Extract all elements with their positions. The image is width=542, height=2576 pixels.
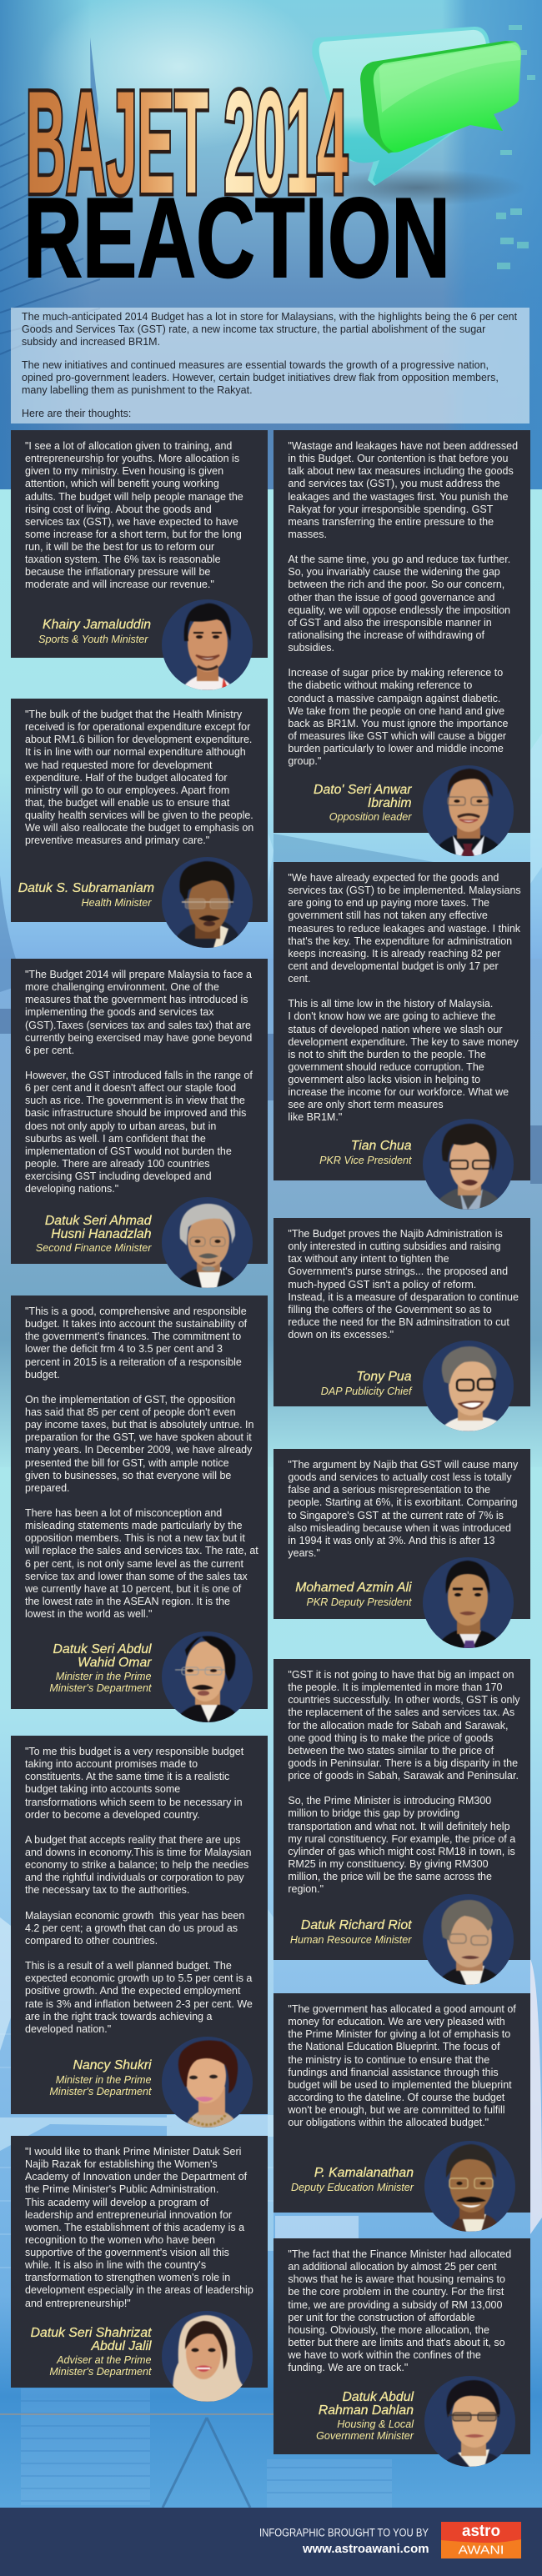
- quote text: preventive measures and primary care.": [25, 834, 209, 846]
- quote text: the ministry is to continue to ensure that the: [288, 2054, 489, 2066]
- quote text: the government's finances. The commitment to: [25, 1331, 241, 1342]
- quote text: fundings and financial assistance through this: [288, 2067, 499, 2078]
- name: Tony Pua: [321, 1370, 413, 1397]
- quote text: We take from the people on one hand and give: [288, 705, 504, 717]
- quote text: and services tax (GST), you must address the: [288, 478, 500, 489]
- quote text: "To me this budget is a very responsible budget: [25, 1746, 243, 1757]
- quote text: On the implementation of GST, the opposition: [25, 1394, 235, 1406]
- quote text: better but there are limits and that's about it, so: [288, 2337, 505, 2348]
- quote text: government still has not taken any effective: [288, 910, 488, 921]
- quote text: that's the key. The expenditure for administration: [288, 935, 512, 947]
- quote text: has said that 85 per cent of people don't even: [25, 1406, 236, 1418]
- quote text: "We have already expected for the goods and: [288, 872, 499, 884]
- quote text: the Prime Minister's Public Administration.: [25, 2183, 218, 2195]
- portrait: Dato' Seri Anwar Ibrahim: [423, 765, 514, 856]
- quote text: the replacement of the sales and services tax. As: [288, 1706, 514, 1718]
- name: Datuk Seri Shahrizat Abdul Jalil: Datuk Seri Shahrizat: [31, 2326, 152, 2340]
- logo: astro awani: AWANI: [459, 2543, 504, 2558]
- quote text: group.": [288, 755, 321, 767]
- quote text: "The government has allocated a good amount of: [288, 2003, 516, 2015]
- quote text: measures to reduce leakages and wastage. I think: [288, 922, 520, 934]
- quote text: time, we are providing a subsidy of RM 13,000: [288, 2299, 502, 2311]
- panel: introduction: The much-anticipated 2014 Budget has a lot in store for Malaysians, with the highlights being the 6 per cent: [22, 310, 517, 322]
- name: Datuk Seri Shahrizat Abdul Jalil: Adviser at the Prime: [57, 2354, 152, 2366]
- quote text: presented the bill for GST, with ample notice: [25, 1457, 229, 1469]
- quote text: "The Budget 2014 will prepare Malaysia to face a: [25, 969, 252, 980]
- quote text: one good thing is to make the price of goods: [288, 1732, 493, 1744]
- name: Khairy Jamaluddin: Khairy Jamaluddin: [43, 618, 151, 632]
- quote text: 6 per cent, is not only same level as the current: [25, 1557, 243, 1569]
- quote text: We will also reallocate the budget to emphasis on: [25, 822, 253, 834]
- panel: introduction: The new initiatives and continued measures are essential towards the growth of a progressive nation,: [22, 358, 489, 370]
- quote text: more challenging environment. One of the: [25, 981, 219, 993]
- quote text: [25, 709, 253, 846]
- quote text: services tax (GST) to be implemented. Malaysians: [288, 885, 521, 896]
- quote text: our obligations within the allocated budget.": [288, 2117, 489, 2128]
- name: Datuk Abdul Rahman Dahlan: Rahman Dahlan: [319, 2403, 414, 2418]
- name: Dato' Seri Anwar Ibrahim: Dato' Seri Anwar: [314, 783, 412, 797]
- name: Datuk S. Subramaniam: Health Minister: [82, 897, 152, 909]
- quote text: positive growth. And the expected employment: [25, 1985, 240, 1997]
- portrait: Mohamed Azmin Ali: [423, 1557, 514, 1648]
- quote text: cent.: [288, 973, 310, 985]
- name: Mohamed Azmin Ali: PKR Deputy President: [307, 1596, 412, 1607]
- name: Tony Pua: DAP Publicity Chief: [321, 1386, 412, 1397]
- quote text: people. There are already 100 countries: [25, 1158, 209, 1170]
- quote text: housing. Obviously, the more allocation, the: [288, 2324, 489, 2336]
- quote text: budget. It takes into account the sustainability of: [25, 1318, 247, 1330]
- name: Datuk Richard Riot: Datuk Richard Riot: [301, 1918, 412, 1932]
- name: Datuk Richard Riot: [290, 1918, 412, 1946]
- quote text: region.": [288, 1883, 324, 1895]
- quote text: attention, which will benefit young working: [25, 478, 219, 489]
- quote text: that, the budget will enable us to ensure that: [25, 797, 229, 809]
- name: Datuk Seri Abdul Wahid Omar: Wahid Omar: [78, 1656, 152, 1669]
- quote text: rate is 3% and inflation between 2-3 per cent. We: [25, 1997, 253, 2009]
- quote text: also misleading because when it was introduced: [288, 1522, 511, 1534]
- quote text: million to bridge this gap by providing: [288, 1807, 459, 1819]
- quote text: leadership and entrepreneurial innovation for: [25, 2209, 232, 2221]
- panel: Nancy Shukri: [11, 1736, 268, 2127]
- quote text: per unit for the construction of affordable: [288, 2312, 475, 2323]
- name: Datuk Abdul Rahman Dahlan: Datuk Abdul: [343, 2390, 414, 2404]
- quote text: countries successfully. In other words, GST is only: [288, 1694, 520, 1706]
- quote text: RM25 in my constituency. By giving RM300: [288, 1858, 489, 1870]
- quote text: "Wastage and leakages have not been addressed: [288, 440, 518, 452]
- quote text: service tax and lower than some of the sales tax: [25, 1571, 248, 1582]
- quote text: price of goods in Sabah, Sarawak and Peninsular.: [288, 1770, 519, 1782]
- logo: astro awani: [441, 2522, 521, 2558]
- quote text: This is a result of a well planned budget. The: [25, 1960, 232, 1972]
- quote text: people. Starting at 6%, it is exorbitant. Comparing: [288, 1496, 518, 1508]
- quote text: [288, 1669, 520, 1895]
- quote text: "I see a lot of allocation given to training, and: [25, 440, 232, 452]
- quote text: false and a serious misrepresentation to the: [288, 1484, 490, 1496]
- quote text: while. It is also in line with the country's: [25, 2259, 206, 2271]
- name: Datuk Seri Abdul Wahid Omar: [49, 1642, 152, 1694]
- portrait: Tony Pua: [423, 1341, 514, 1431]
- quote text: misleading statements made particularly by the: [25, 1520, 243, 1531]
- quote text: leakages and the wastages first. You punish the: [288, 490, 508, 502]
- quote text: implementation of GST would not burden the: [25, 1145, 232, 1157]
- quote text: Malaysian economic growth this year has been: [25, 1910, 244, 1922]
- quote text: opposition members. This is not a new tax but it: [25, 1532, 245, 1544]
- quote text: "The Budget proves the Najib Administration is: [288, 1228, 503, 1240]
- quote text: [288, 440, 518, 767]
- quote text: like BR1M.": [288, 1111, 342, 1123]
- name: Datuk Seri Shahrizat Abdul Jalil: Abdul Jalil: [91, 2339, 152, 2353]
- panel: Tony Pua: [274, 1218, 530, 1431]
- quote text: will replace the sales and services tax. The rate, at: [25, 1545, 258, 1556]
- name: Datuk Seri Abdul Wahid Omar: Minister's Department: [49, 1682, 152, 1694]
- quote text: services tax (GST), we have expected to have: [25, 516, 238, 528]
- name: Tian Chua: PKR Vice President: [319, 1154, 412, 1165]
- name: Datuk Richard Riot: Human Resource Minister: [290, 1934, 412, 1946]
- quote text: Najib Razak for establishing the Women's: [25, 2158, 218, 2170]
- quote text: [25, 1306, 258, 1620]
- portrait: Datuk Abdul Rahman Dahlan: [424, 2376, 515, 2467]
- quote text: my rural constituency. For example, the price of a: [288, 1833, 515, 1845]
- quote text: is not to shift the burden to the people. The: [288, 1049, 486, 1060]
- quote text: moderate and will increase our revenue.": [25, 579, 214, 590]
- quote text: ministry will go to our employees. Apart from: [25, 784, 229, 796]
- panel: introduction: opined pro-government leaders. However, certain budget initiatives drew flak from opposition members,: [22, 372, 499, 383]
- panel: introduction: [11, 308, 529, 423]
- quote text: are going to end up paying more taxes. The: [288, 897, 489, 909]
- quote text: development especially in the areas of leadership: [25, 2284, 253, 2296]
- quote text: rationalising the increase of withdrawing of: [288, 629, 484, 641]
- name: P. Kamalanathan: Deputy Education Minister: [291, 2181, 414, 2193]
- quote text: suburbs as well. I am confident that the: [25, 1133, 206, 1145]
- panel: introduction: subsidy and increased BR1M.: [22, 335, 160, 347]
- quote text: million, the price will be the same across the: [288, 1871, 492, 1882]
- name: Dato' Seri Anwar Ibrahim: [314, 783, 412, 823]
- name: Dato' Seri Anwar Ibrahim: Opposition leader: [329, 811, 412, 823]
- portrait: Datuk Seri Shahrizat Abdul Jalil: [162, 2311, 253, 2402]
- panel: Datuk Abdul Rahman Dahlan: [274, 2238, 530, 2467]
- quote text: quality health services will be given to the people.: [25, 809, 253, 821]
- panel: Datuk Seri Abdul Wahid Omar: [11, 1296, 268, 1722]
- quote text: order to become a developed country.: [25, 1809, 200, 1821]
- quote text: "GST it is not going to have that big an impact on: [288, 1669, 514, 1681]
- name: Datuk Abdul Rahman Dahlan: Housing & Local: [337, 2418, 414, 2430]
- name: Nancy Shukri: Minister's Department: [49, 2086, 152, 2097]
- footer: [0, 2508, 542, 2576]
- logo: astro awani: astro: [462, 2522, 500, 2540]
- quote text: Government's purse strings... the proposed and: [288, 1265, 508, 1277]
- portrait: Khairy Jamaluddin: [162, 599, 253, 690]
- quote text: I don't know how we are going to achieve the: [288, 1010, 495, 1022]
- quote text: funding. We are on track.": [288, 2362, 408, 2373]
- quote text: developed nation.": [25, 2023, 111, 2035]
- quote text: in 1994 it was only at 3%. And this is after 13: [288, 1535, 494, 1546]
- name: Mohamed Azmin Ali: [295, 1581, 412, 1607]
- quote text: see are only short term measures: [288, 1099, 444, 1110]
- quote text: keeps increasing. It is already reaching 82 per: [288, 948, 500, 960]
- quote text: 4.2 per cent; a growth that can do us proud as: [25, 1922, 238, 1934]
- quote text: other than the issue of good governance and: [288, 592, 495, 604]
- name: Khairy Jamaluddin: Sports & Youth Minister: [38, 634, 148, 645]
- quote text: the National Education Blueprint. The focus of: [288, 2041, 500, 2052]
- name: Khairy Jamaluddin: [38, 618, 151, 645]
- quote text: transformations which seem to be necessary in: [25, 1796, 243, 1807]
- quote text: we had requested more for development: [25, 759, 212, 770]
- quote text: does not only apply to urban areas, but in: [25, 1120, 216, 1132]
- quote text: lowest in the world as well.": [25, 1608, 152, 1620]
- quote text: taking into account promises made to: [25, 1758, 198, 1770]
- portrait: Datuk Seri Abdul Wahid Omar: [162, 1631, 253, 1722]
- quote text: economy to strike a balance; to help the needies: [25, 1859, 248, 1871]
- quote text: [288, 872, 521, 1123]
- name: P. Kamalanathan: [291, 2166, 414, 2193]
- name: Dato' Seri Anwar Ibrahim: Ibrahim: [368, 795, 412, 810]
- quote text: of GST and also the irresponsible manner in: [288, 617, 492, 629]
- quote text: recognition to the women who have been: [25, 2234, 215, 2246]
- name: Datuk Abdul Rahman Dahlan: [316, 2391, 414, 2442]
- name: Datuk Seri Abdul Wahid Omar: Datuk Seri Abdul: [53, 1642, 152, 1656]
- quote text: [288, 2248, 511, 2374]
- quote text: only interested in cutting subsidies and raising: [288, 1240, 500, 1252]
- name: Tian Chua: [319, 1139, 412, 1165]
- icon: speech bubbles: [312, 27, 521, 186]
- portrait: Datuk Richard Riot: [423, 1894, 514, 1985]
- quote text: government should reduce corruption. The: [288, 1061, 484, 1073]
- quote text: filling the coffers of the Government so as to: [288, 1304, 492, 1316]
- quote text: burden particularly to lower and middle income: [288, 743, 504, 754]
- quote text: equality, we will oppose endlessly the imposition: [288, 604, 510, 616]
- quote text: transformation to strengthen women's role in: [25, 2272, 230, 2283]
- quote text: and entrepreneurship!": [25, 2298, 131, 2309]
- panel: P. Kamalanathan: [274, 1993, 530, 2232]
- panel: Tian Chua: [274, 862, 530, 1210]
- quote text: according to the dateline. Of course the budget: [288, 2092, 504, 2103]
- name: Mohamed Azmin Ali: Mohamed Azmin Ali: [295, 1581, 412, 1595]
- quote text: A budget that accepts reality that there are ups: [25, 1834, 240, 1846]
- quote text: So, you invariably cause the widening the gap: [288, 566, 500, 578]
- quote text: reduce the need for the BN adminsitration to cut: [288, 1316, 509, 1328]
- quote text: [25, 440, 243, 590]
- quote text: government also lacks vision in helping to: [288, 1074, 480, 1085]
- portrait: P. Kamalanathan: [424, 2141, 515, 2232]
- quote text: for the allocation made for Sabah and Sarawak,: [288, 1719, 508, 1731]
- quote text: developing nations.": [25, 1183, 118, 1195]
- quote text: "The argument by Najib that GST will cause many: [288, 1459, 518, 1471]
- quote text: tax without any intent to tighten the: [288, 1253, 449, 1265]
- quote text: supportive of the government's vision all this: [25, 2247, 229, 2258]
- quote text: received is for operational expenditure except for: [25, 721, 250, 733]
- quote text: However, the GST introduced falls in the range of: [25, 1070, 253, 1081]
- quote text: expected economic growth up to 5.5 per cent is a: [25, 1972, 252, 1984]
- quote text: taxation system. The 6% tax is reasonable: [25, 554, 221, 565]
- quote text: years.": [288, 1547, 320, 1559]
- quote text: 6 per cent.: [25, 1045, 74, 1056]
- quote text: goods and services to actually cost less is totally: [288, 1471, 512, 1483]
- panel: introduction: Goods and Services Tax (GST) rate, a new income tax structure, the partial abolishment of the sugar: [22, 323, 485, 335]
- quote text: between the rich and the poor. So our concern,: [288, 579, 504, 590]
- quote text: money for education. We are very pleased with: [288, 2016, 505, 2027]
- quote text: lower the deficit frm 4 to 3.5 per cent and 3: [25, 1343, 223, 1355]
- quote text: status of developed nation where we slash our: [288, 1024, 502, 1035]
- name: Datuk Seri Shahrizat Abdul Jalil: [31, 2326, 152, 2378]
- quote text: some increase for a short term, but for the long: [25, 529, 242, 540]
- quote text: measures that the government has introduced is: [25, 994, 248, 1005]
- quote text: budget will be used to implemented the blueprint: [288, 2079, 512, 2091]
- quote text: given to my ministry. Even housing is given: [25, 465, 223, 477]
- quote text: expenditure. Half of the budget allocated for: [25, 772, 228, 784]
- quote text: Rakyat for your irresponsible spending. GST: [288, 504, 493, 515]
- quote text: given to businesses, so that everyone will be: [25, 1470, 231, 1481]
- quote text: talk about new tax measures including the goods: [288, 465, 514, 477]
- footer credit text: www.astroawani.com: [302, 2543, 429, 2556]
- name: Datuk Seri Ahmad Husni Hanadzlah: Datuk Seri Ahmad: [45, 1214, 152, 1228]
- quote text: between the two states similar to the price of: [288, 1745, 494, 1757]
- quote text: subsidies.: [288, 642, 334, 654]
- name: Datuk Seri Shahrizat Abdul Jalil: Minister's Department: [49, 2366, 152, 2378]
- quote text: an additional allocation by almost 25 per cent: [288, 2261, 497, 2273]
- quote text: transportation and what not. It will definitely help: [288, 1821, 510, 1832]
- quote text: such as rice. The government is in view that the: [25, 1095, 245, 1106]
- name: Datuk S. Subramaniam: Datuk S. Subramaniam: [18, 881, 154, 895]
- quote text: much-hyped GST isn't a policy of reform.: [288, 1279, 476, 1291]
- quote text: cent and developmental budget is only 17 per: [288, 960, 499, 972]
- name: Tian Chua: Tian Chua: [351, 1139, 412, 1153]
- panel: introduction: Here are their thoughts:: [22, 407, 131, 418]
- quote text: back as BR1M. You must ignore the importance: [288, 718, 508, 729]
- quote text: "The fact that the Finance Minister had allocated: [288, 2248, 511, 2260]
- portrait: Tian Chua: [423, 1119, 514, 1210]
- quote text: adults. The budget will help people manage the: [25, 490, 243, 502]
- name: Tony Pua: Tony Pua: [356, 1370, 412, 1384]
- quote text: of measures like GST which will cause a bigger: [288, 730, 506, 742]
- portrait: Nancy Shukri: [162, 2037, 253, 2127]
- quote text: It is in line with our normal expenditure although: [25, 746, 246, 758]
- name: Datuk Seri Abdul Wahid Omar: Minister in the Prime: [56, 1671, 152, 1682]
- name: Datuk Abdul Rahman Dahlan: Government Minister: [316, 2430, 414, 2442]
- quote text: "The bulk of the budget that the Health Ministry: [25, 709, 242, 720]
- quote text: basic infrastructure should be improved and this: [25, 1107, 246, 1119]
- quote text: Instead, it is a measure of desparation to continue: [288, 1291, 519, 1303]
- quote text: (GST).Taxes (services tax and sales tax) that are: [25, 1019, 251, 1030]
- quote text: won't be enough, but we are committed to fulfill: [288, 2104, 505, 2116]
- name: Datuk Seri Ahmad Husni Hanadzlah: Second Finance Minister: [36, 1242, 152, 1254]
- quote text: "I would like to thank Prime Minister Datuk Seri: [25, 2146, 241, 2158]
- quote text: Increase of sugar price by making reference to: [288, 667, 503, 679]
- quote text: are in the right track towards achieving a: [25, 2011, 212, 2022]
- panel: Khairy Jamaluddin: [11, 430, 268, 690]
- quote text: conduct a massive campaign against diabetic.: [288, 692, 500, 704]
- quote text: we currently have at 10 percent, but it is one of: [25, 1583, 241, 1595]
- name: Nancy Shukri: [49, 2058, 152, 2097]
- name: Nancy Shukri: Minister in the Prime: [56, 2074, 152, 2086]
- name: Nancy Shukri: Nancy Shukri: [73, 2058, 152, 2072]
- quote text: we have to work within the confines of the: [288, 2349, 481, 2361]
- quote text: constituents. At the same time it is a realistic: [25, 1771, 229, 1782]
- quote text: rising cost of living. About the goods and: [25, 504, 212, 515]
- quote text: down on its excesses.": [288, 1329, 394, 1341]
- quote text: So, the Prime Minister is introducing RM300: [288, 1795, 491, 1807]
- quote text: goods in Peninsular. There is a big disparity in the: [288, 1757, 518, 1769]
- name: Datuk S. Subramaniam: [18, 881, 154, 909]
- name: Datuk Seri Ahmad Husni Hanadzlah: Husni Hanadzlah: [51, 1227, 152, 1240]
- quote text: compared to other countries.: [25, 1935, 158, 1947]
- quote text: the lowest rate in the ASEAN region. It is the: [25, 1596, 230, 1607]
- quote text: run, it will be the best for us to reform our: [25, 541, 214, 553]
- quote text: [25, 969, 253, 1195]
- quote text: be the core problem in the country. For the first: [288, 2286, 504, 2298]
- quote text: increase the income for our workforce. What we: [288, 1086, 509, 1098]
- quote text: exercising GST including developed and: [25, 1170, 212, 1182]
- quote text: masses.: [288, 529, 327, 540]
- quote text: about RM1.6 billion for development expenditure.: [25, 734, 252, 745]
- quote text: entrepreneurship for youths. More allocation is: [25, 453, 239, 464]
- quote text: currently being exercised may have gone beyond: [25, 1032, 252, 1044]
- quote text: At the same time, you go and reduce tax further.: [288, 554, 510, 565]
- quote text: This academy will develop a program of: [25, 2196, 208, 2208]
- quote text: [288, 2003, 516, 2128]
- panel: Dato' Seri Anwar Ibrahim: [274, 430, 530, 856]
- quote text: cylinder of gas which might cost RM18 in town, is: [288, 1846, 515, 1857]
- panel: Datuk S. Subramaniam: [11, 699, 268, 948]
- portrait: Datuk S. Subramaniam: [162, 857, 253, 948]
- quote text: There has been a lot of misconception and: [25, 1507, 222, 1519]
- quote text: the people. It is implemented in more than 170: [288, 1681, 502, 1693]
- quote text: to Singapore's GST at the current rate of 7% is: [288, 1509, 504, 1521]
- quote text: and the rightful individuals or corporation to pay: [25, 1872, 244, 1883]
- quote text: in this Budget. Our contention is that before you: [288, 453, 508, 464]
- quote text: preparation for the GST, we have spoken about it: [25, 1431, 252, 1443]
- quote text: shows that he is aware that housing remains to: [288, 2273, 505, 2285]
- panel: Datuk Richard Riot: [274, 1659, 530, 1985]
- quote text: development expenditure. The key to save money: [288, 1036, 519, 1048]
- quote text: because the inflationary pressure will be: [25, 566, 210, 578]
- panel: Datuk Seri Shahrizat Abdul Jalil: [11, 2136, 268, 2402]
- quote text: the Prime Minister for giving a lot of emphasis to: [288, 2028, 510, 2040]
- panel: introduction: many labelling them as punishment to the Rakyat.: [22, 383, 253, 395]
- quote text: [25, 2146, 253, 2309]
- quote text: means transferring the entire pressure to the: [288, 516, 494, 528]
- quote text: budget.: [25, 1369, 60, 1381]
- panel: Datuk Seri Ahmad Husni Hanadzlah: [11, 959, 268, 1288]
- quote text: budget taking into accounts some: [25, 1783, 180, 1795]
- quote text: implementing the goods and services tax: [25, 1006, 214, 1018]
- quote text: [288, 1228, 519, 1341]
- quote text: women. The establishment of this academy is a: [25, 2222, 244, 2233]
- quote text: pay income taxes, but that is absolutely untrue. In: [25, 1419, 253, 1431]
- quote text: the necessary tax to the authorities.: [25, 1884, 189, 1896]
- quote text: the diabetic without making reference to: [288, 679, 472, 691]
- quote text: [288, 1459, 519, 1559]
- panel: Mohamed Azmin Ali: [274, 1449, 530, 1648]
- quote text: and downs in economy.This is time for Malaysian: [25, 1847, 251, 1858]
- name: Datuk Seri Ahmad Husni Hanadzlah: [36, 1214, 152, 1254]
- quote text: This is all time low in the history of Malaysia.: [288, 998, 493, 1010]
- quote text: prepared.: [25, 1482, 70, 1494]
- quote text: percent in 2015 is a reiteration of a responsible: [25, 1356, 242, 1367]
- quote text: many years. In December 2009, we have already: [25, 1444, 252, 1456]
- quote text: "This is a good, comprehensive and responsible: [25, 1306, 247, 1317]
- portrait: Datuk Seri Ahmad Husni Hanadzlah: [162, 1197, 253, 1288]
- quote text: Academy of Innovation under the Department of: [25, 2171, 247, 2183]
- quote text: 6 per cent and it doesn't affect our staple food: [25, 1082, 236, 1094]
- footer credit text: [250, 2523, 434, 2561]
- quote text: [25, 1746, 253, 2035]
- name: P. Kamalanathan: P. Kamalanathan: [314, 2166, 414, 2180]
